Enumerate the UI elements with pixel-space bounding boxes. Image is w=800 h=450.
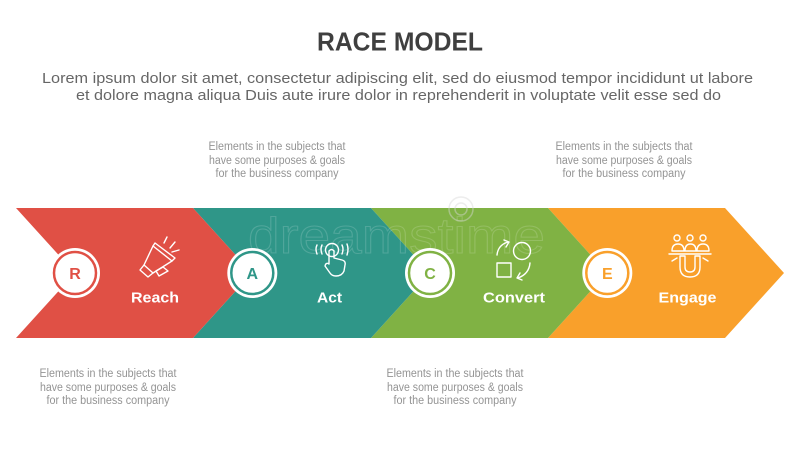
text block: Act description: Elements in the subjects that bbox=[208, 141, 346, 153]
text block: Convert description bbox=[386, 368, 524, 407]
arrow: Act bbox=[193, 208, 430, 338]
text block: Convert description: have some purposes & goals bbox=[387, 382, 523, 394]
text block: Reach description: for the business company bbox=[46, 395, 170, 407]
title: RACE MODEL bbox=[317, 26, 483, 56]
watermark: dreamstime bbox=[248, 208, 545, 264]
text block: Act description: have some purposes & goals bbox=[209, 155, 345, 167]
icon: megaphone bbox=[140, 237, 179, 277]
icon: shapes and arrows bbox=[497, 240, 530, 280]
subtitle: Lorem ipsum dolor sit amet, consectetur adipiscing elit, sed do eiusmod tempor incididunt ut labore bbox=[42, 70, 753, 87]
label: Act: Act bbox=[317, 290, 342, 306]
badge: E bbox=[582, 248, 632, 298]
badge: R: R bbox=[69, 266, 81, 283]
text block: Engage description bbox=[556, 141, 693, 180]
text block: Engage description: Elements in the subjects that bbox=[556, 141, 693, 153]
text block: Convert description: for the business company bbox=[394, 395, 517, 407]
badge: A bbox=[227, 248, 277, 298]
subtitle: et dolore magna aliqua Duis aute irure dolor in reprehenderit in voluptate velit esse sed do bbox=[76, 87, 721, 104]
badge: E: E bbox=[602, 266, 613, 283]
badge: C bbox=[405, 248, 455, 298]
text block: Reach description bbox=[40, 368, 177, 407]
icon: touch hand bbox=[316, 244, 348, 276]
arrow: Reach bbox=[16, 208, 252, 338]
arrow: Engage bbox=[548, 208, 784, 338]
badge: R bbox=[50, 248, 100, 298]
subtitle bbox=[42, 70, 753, 104]
icon: people and magnet bbox=[669, 235, 711, 277]
text block: Engage description: have some purposes & goals bbox=[556, 155, 692, 167]
text block: Engage description: for the business company bbox=[562, 168, 686, 180]
arrow: Convert bbox=[371, 208, 607, 338]
text block: Reach description: Elements in the subjects that bbox=[40, 368, 177, 380]
label: Reach: Reach bbox=[131, 290, 179, 306]
text block: Convert description: Elements in the subjects that bbox=[386, 368, 524, 380]
badge: C: C bbox=[424, 266, 436, 283]
text block: Act description: for the business company bbox=[216, 168, 339, 180]
text block: Act description bbox=[208, 141, 346, 180]
label: Engage: Engage bbox=[658, 290, 716, 306]
text block: Reach description: have some purposes & goals bbox=[40, 382, 176, 394]
label: Convert: Convert bbox=[483, 290, 545, 306]
badge: A: A bbox=[247, 266, 259, 283]
